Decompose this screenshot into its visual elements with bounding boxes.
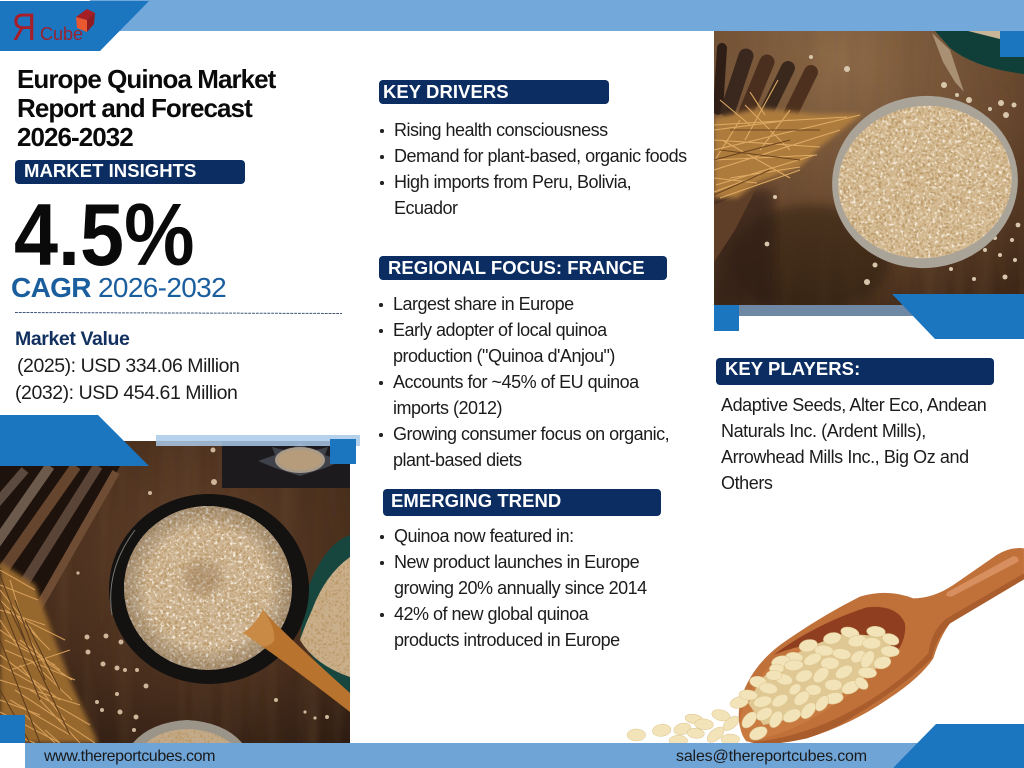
list: key drivers: High imports from Peru, Bolivia, <box>394 172 631 192</box>
accent: translucent strip under right photo <box>714 305 929 316</box>
wooden mat <box>0 466 120 610</box>
divider under CAGR <box>15 312 342 314</box>
heading: key players: KEY PLAYERS: <box>725 358 860 379</box>
accent: translucent bar, lower left photo <box>156 435 360 446</box>
accent: blue square, right photo bottom <box>714 305 739 331</box>
heading: market insights: MARKET INSIGHTS <box>24 160 196 181</box>
accent: blue corner polygon, left <box>0 415 149 466</box>
list: regional focus: Early adopter of local quinoa <box>393 320 607 340</box>
logo: wordmark: Cube <box>40 24 83 44</box>
green bowl <box>300 535 350 693</box>
list: emerging trend: products introduced in Europe <box>394 630 620 650</box>
accent: blue square, left photo bottom <box>0 715 25 743</box>
small bowl at bottom <box>132 720 243 744</box>
text: key players: Adaptive Seeds, Alter Eco, Andean <box>721 395 986 415</box>
list: regional focus <box>379 294 669 470</box>
big number: CAGR value: 4.5% <box>14 185 195 284</box>
bamboo mat <box>718 48 811 115</box>
footer: email: sales@thereportcubes.com <box>676 748 867 765</box>
scattered grains <box>765 55 1020 285</box>
list: regional focus: Largest share in Europe <box>393 294 574 314</box>
text: key players: Naturals Inc. (Ardent Mills), <box>721 421 926 441</box>
heading: key drivers: KEY DRIVERS <box>383 81 509 102</box>
heading: key players <box>716 358 994 385</box>
wheat sheaf <box>0 562 98 743</box>
logo: reversed R: R <box>12 6 36 48</box>
footer bar <box>25 743 920 768</box>
accent: blue polygon, right photo <box>892 294 1024 339</box>
market value 2025: (2025): USD 334.06 Million <box>17 355 239 377</box>
list: regional focus: production ("Quinoa d'Anjou") <box>393 346 615 366</box>
photo: quinoa bowl, upper right <box>714 31 1024 315</box>
text: key players: Arrowhead Mills Inc., Big Oz and <box>721 447 969 467</box>
CAGR label: CAGR 2026-2032 <box>11 272 226 302</box>
market value 2032: (2032): USD 454.61 Million <box>15 382 237 404</box>
quinoa in black bowl <box>124 506 292 670</box>
market value heading: Market Value <box>15 328 129 350</box>
list: emerging trend: 42% of new global quinoa <box>394 604 588 624</box>
quinoa grains <box>627 625 901 746</box>
wheat ears <box>714 80 862 198</box>
list: key drivers <box>380 120 687 218</box>
photo: quinoa bowl, lower left <box>0 441 352 744</box>
accent: blue square, top right <box>1000 31 1024 57</box>
accent: footer blue polygon <box>893 724 1024 768</box>
market value <box>15 328 239 404</box>
footer: website: www.thereportcubes.com <box>44 748 215 765</box>
list: regional focus: Growing consumer focus on organic, <box>393 424 669 444</box>
grain trail <box>932 33 964 92</box>
title: 2026-2032 <box>17 122 133 152</box>
list: key drivers: Rising health consciousness <box>394 120 608 140</box>
logo: cube <box>76 9 95 32</box>
accent: blue square, left photo top <box>330 439 356 464</box>
list: emerging trend: New product launches in Europe <box>394 552 639 572</box>
text: key players <box>721 395 986 493</box>
heading: emerging trend <box>383 489 661 516</box>
list: regional focus: plant-based diets <box>393 450 522 470</box>
list: emerging trend: Quinoa now featured in: <box>394 526 574 546</box>
dark stick under wheat <box>714 187 757 262</box>
title: Report and Forecast <box>17 93 252 123</box>
list: key drivers: Demand for plant-based, organic foods <box>394 146 687 166</box>
list: regional focus: Accounts for ~45% of EU quinoa <box>393 372 639 392</box>
green dish <box>935 31 1024 74</box>
wooden spoon <box>243 610 350 712</box>
list: emerging trend <box>380 526 647 650</box>
logo panel <box>0 1 149 51</box>
list: regional focus: imports (2012) <box>393 398 502 418</box>
black bowl <box>109 494 309 684</box>
heading: regional focus: REGIONAL FOCUS: FRANCE <box>388 257 645 278</box>
dark box with star <box>222 446 350 488</box>
top banner <box>90 0 1024 31</box>
heading: market insights <box>15 160 245 184</box>
title <box>17 64 276 152</box>
scattered grains <box>76 448 329 732</box>
text: key players: Others <box>721 473 772 493</box>
title: Europe Quinoa Market <box>17 64 275 94</box>
heading: key drivers <box>379 80 609 104</box>
list: emerging trend: growing 20% annually since 2014 <box>394 578 647 598</box>
illustration: wooden scoop with quinoa <box>627 548 1024 746</box>
heading: emerging trend: EMERGING TREND <box>391 490 561 511</box>
list: key drivers: Ecuador <box>394 198 458 218</box>
grey bowl <box>832 96 1018 268</box>
grain bed <box>748 633 895 725</box>
